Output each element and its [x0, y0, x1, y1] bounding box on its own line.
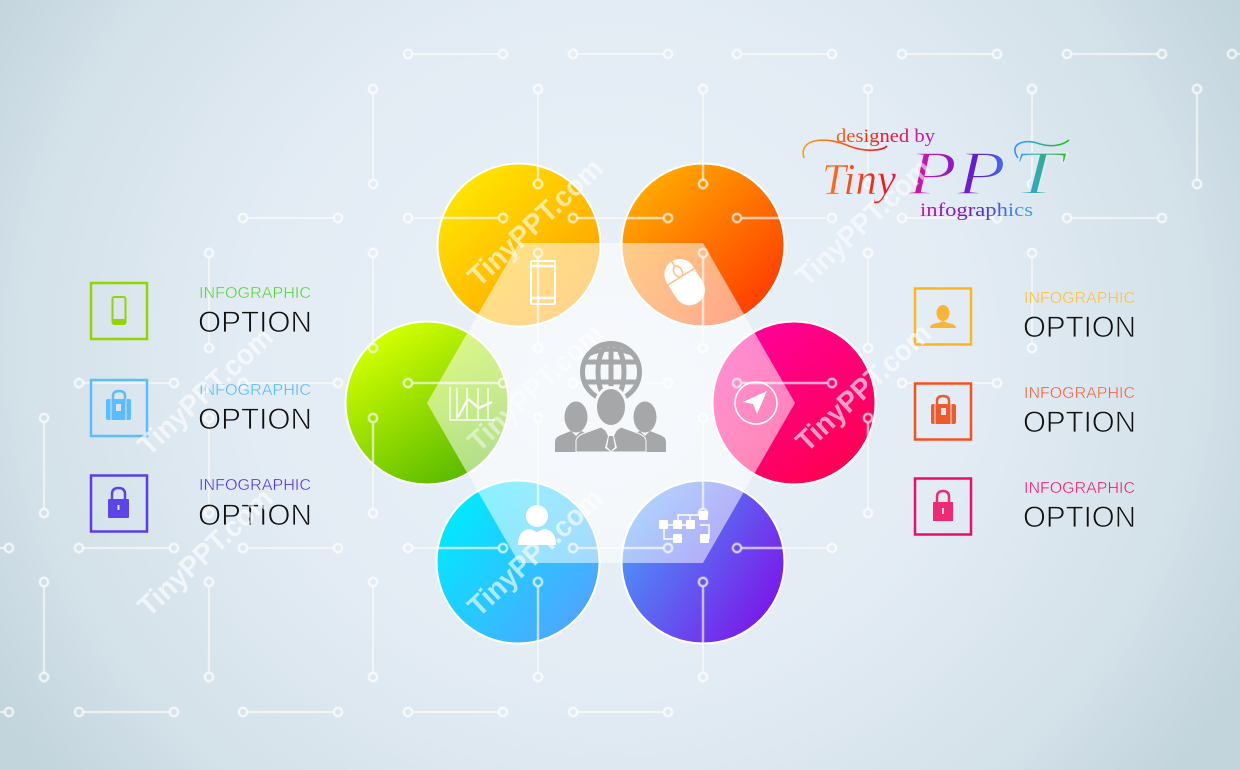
- label: infographic: INFOGRAPHIC: [199, 477, 311, 494]
- label: option: OPTION: [1023, 311, 1136, 344]
- label: option: OPTION: [198, 499, 312, 532]
- circle: orange: [622, 164, 784, 326]
- icon: user: [518, 505, 556, 545]
- left option 2: [91, 380, 312, 436]
- right option 3: [915, 478, 1136, 534]
- label: option: OPTION: [1023, 501, 1136, 534]
- icon: compass: [735, 382, 777, 424]
- panel: six coloured circles: [346, 164, 876, 644]
- logo wordmark: TinyPPT: [822, 140, 1069, 208]
- logo swashes: [803, 140, 1069, 158]
- circle: pink: [712, 322, 876, 484]
- watermark: TinyPPT.com: [462, 317, 610, 458]
- icon: globe: [582, 343, 640, 401]
- left option 1: [91, 283, 312, 339]
- logo line: infographics: infographics: [920, 200, 1033, 221]
- icon: people with globe: [555, 343, 666, 452]
- label: infographic: INFOGRAPHIC: [1024, 480, 1135, 497]
- icon box: pink padlock: [915, 478, 971, 534]
- logo wordmark: TinyPPT: Tiny: [822, 155, 896, 204]
- right option 1: [915, 288, 1136, 344]
- icon box: green phone: [91, 283, 147, 339]
- logo wordmark: TinyPPT: PP: [907, 140, 1006, 208]
- circle: yellow: [438, 164, 600, 326]
- icon box: violet padlock: [91, 476, 147, 532]
- circle: green: [346, 322, 508, 484]
- right option 2: [915, 384, 1136, 440]
- circle: violet: [622, 480, 784, 644]
- logo: designed by TinyPPT infographics: [803, 126, 1069, 221]
- watermarks: [132, 152, 938, 623]
- icon: smartphone: [531, 261, 555, 304]
- circle: cyan: [436, 480, 600, 644]
- icon box: amber person: [915, 288, 971, 344]
- watermark: TinyPPT.com: [790, 317, 938, 458]
- label: option: OPTION: [198, 306, 312, 339]
- icon: line chart: [450, 387, 495, 420]
- label: option: OPTION: [1023, 406, 1136, 439]
- icon: flowchart: [659, 511, 709, 543]
- watermark: TinyPPT.com: [132, 321, 280, 462]
- icon box: blue briefcase: [91, 380, 147, 436]
- label: infographic: INFOGRAPHIC: [199, 382, 311, 399]
- watermark: TinyPPT.com: [790, 152, 938, 293]
- left option 3: [91, 476, 312, 532]
- logo line: designed by: designed by: [836, 126, 936, 147]
- watermark: TinyPPT.com: [462, 152, 610, 293]
- logo wordmark: TinyPPT: T: [1012, 140, 1069, 208]
- label: infographic: INFOGRAPHIC: [199, 285, 311, 302]
- icon box: red briefcase: [915, 384, 971, 440]
- icon: three business people: [555, 388, 666, 452]
- watermark: TinyPPT.com: [132, 482, 280, 623]
- label: infographic: INFOGRAPHIC: [1024, 290, 1135, 307]
- label: option: OPTION: [198, 403, 312, 436]
- label: infographic: INFOGRAPHIC: [1024, 385, 1135, 402]
- icon: computer mouse: [659, 253, 711, 311]
- central hexagon: [427, 243, 795, 563]
- watermark: TinyPPT.com: [462, 482, 610, 623]
